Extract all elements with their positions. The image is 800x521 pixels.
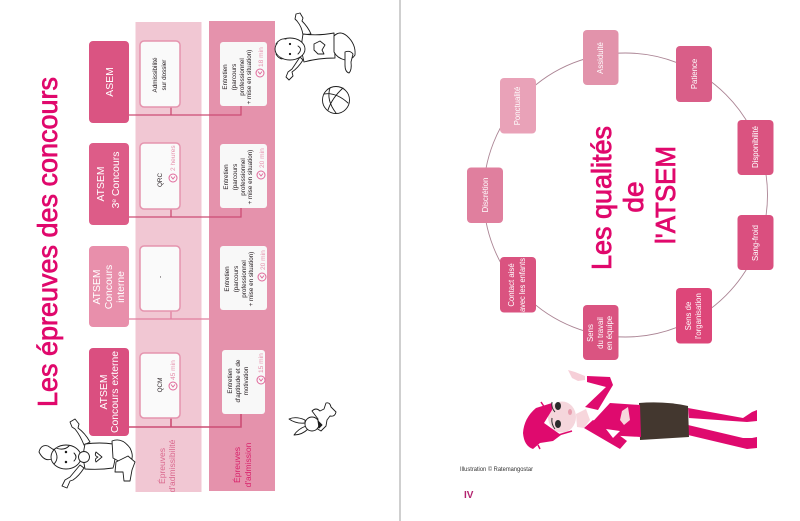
admission box: ASEM: (parcours <box>231 64 238 90</box>
admissibilité box: aucune épreuve: - <box>157 276 164 278</box>
admission box: ATSEM 3e concours: + mise en situation) <box>247 150 254 204</box>
quality: sang-froid <box>738 215 774 270</box>
quality: contact aisé avec les enfants <box>500 257 536 312</box>
illustration: woman <box>523 370 757 449</box>
quality: disponibilité: Disponibilité <box>751 126 760 168</box>
admission box: ATSEM concours externe: Entretien <box>227 368 234 394</box>
admissibilité box: ASEM <box>140 41 180 107</box>
quality: assiduité <box>583 30 618 85</box>
header: ASEM <box>89 41 129 123</box>
quality: sens de l'organisation: l'organisation <box>694 293 703 339</box>
label: épreuves d'admissibilité: d'admissibilité <box>167 439 177 492</box>
illustration: baby with heart top <box>275 13 355 80</box>
admissibilité box: QRC: 2 heures <box>170 145 177 171</box>
admissibilité box: QRC: QRC <box>157 173 164 187</box>
quality: disponibilité <box>738 120 774 175</box>
title: les qualités de l'ATSEM: Les qualités <box>586 126 617 270</box>
admission box: ATSEM concours interne: (parcours <box>233 266 240 292</box>
admission box: ASEM: Entretien <box>222 64 229 90</box>
quality: ponctualité <box>500 78 536 134</box>
label: épreuves d'admissibilité <box>157 439 177 492</box>
admissibilité box: ASEM: sur dossier <box>161 60 168 90</box>
header: ATSEM concours interne: Concours <box>104 265 115 309</box>
header: ATSEM 3e concours <box>89 143 129 225</box>
header: ATSEM 3e concours: Concours <box>111 152 122 199</box>
admissibilité box: QCM: QCM <box>157 378 164 392</box>
header: ATSEM 3e concours: e <box>111 199 118 203</box>
admission box: ATSEM concours externe: d'aptitude et de <box>235 359 242 402</box>
band: épreuves d'admission <box>209 21 275 491</box>
admission box: ASEM: professionnel <box>239 58 246 96</box>
label: épreuves d'admission: d'admission <box>243 442 253 487</box>
header: ASEM: ASEM <box>105 67 116 97</box>
illustration: ball <box>322 86 350 114</box>
illustration: baby with heart dress <box>39 419 135 488</box>
quality: sang-froid: Sang-froid <box>751 225 760 261</box>
quality: patience: Patience <box>690 59 699 89</box>
admission box: ATSEM 3e concours <box>220 144 267 208</box>
credit: Illustration © Ratemangostar <box>460 465 534 473</box>
admission box: ATSEM 3e concours: (parcours <box>232 164 239 190</box>
admission box: ATSEM 3e concours: Entretien <box>223 164 230 190</box>
admission box: ATSEM concours interne: 20 min <box>260 250 267 270</box>
quality: sens de l'organisation: Sens de <box>684 302 693 330</box>
quality: patience <box>676 46 712 102</box>
header: ATSEM concours externe: Concours externe <box>110 351 121 433</box>
quality: sens du travail en équipe: en équipe <box>605 316 614 350</box>
admission box: ASEM <box>220 42 267 106</box>
band: épreuves d'admissibilité <box>136 22 202 492</box>
admission box: ATSEM 3e concours: professionnel <box>240 158 247 196</box>
admission box: ATSEM concours interne: professionnel <box>241 260 248 298</box>
quality: sens de l'organisation <box>676 288 712 344</box>
page number: IV <box>464 490 474 501</box>
admission box: ATSEM concours externe: motivation <box>243 366 250 395</box>
quality: discrétion <box>467 168 503 223</box>
quality: contact aisé avec les enfants: avec les enfants <box>518 258 527 312</box>
header: ATSEM concours externe <box>89 348 129 436</box>
admission box: ATSEM concours externe: 15 min <box>258 353 265 373</box>
quality: assiduité: Assiduité <box>596 42 605 74</box>
header: ATSEM 3e concours: ATSEM <box>96 166 107 202</box>
admission box: ATSEM concours interne <box>220 246 267 310</box>
quality: discrétion: Discrétion <box>481 178 490 212</box>
admission box: ASEM: + mise en situation) <box>246 50 253 104</box>
title: les qualités de l'ATSEM: de <box>618 181 649 213</box>
quality: ponctualité: Ponctualité <box>513 87 522 125</box>
admission box: ATSEM concours externe <box>222 350 265 414</box>
title: les qualités de l'ATSEM <box>586 126 681 270</box>
header: ATSEM 3e concours: 3 <box>111 203 122 208</box>
header: ATSEM concours externe: ATSEM <box>99 374 110 410</box>
admission box: ATSEM concours interne: + mise en situation) <box>248 252 255 306</box>
quality: sens du travail en équipe: du travail <box>596 317 605 349</box>
admissibilité box: aucune épreuve <box>140 246 180 311</box>
admission box: ATSEM concours interne: Entretien <box>224 266 231 292</box>
header: ATSEM concours interne <box>89 246 129 327</box>
panel: les qualités de l'ATSEM <box>460 30 774 501</box>
admissibilité box: QCM <box>140 353 180 418</box>
illustration: toy rabbit <box>289 403 336 435</box>
admissibilité box: ASEM: Admissibilité <box>152 57 159 92</box>
quality: contact aisé avec les enfants: Contact aisé <box>507 263 516 307</box>
admission box: ASEM: 18 min <box>258 47 265 67</box>
connectors <box>129 106 241 427</box>
quality: sens du travail en équipe: Sens <box>586 324 595 342</box>
quality: sens du travail en équipe <box>583 305 618 360</box>
header: ATSEM concours interne: ATSEM <box>92 269 103 305</box>
label: épreuves d'admission <box>232 442 253 487</box>
title: les qualités de l'ATSEM: l'ATSEM <box>650 146 681 244</box>
ring connecting the qualities <box>484 53 768 337</box>
header: ATSEM concours interne: interne <box>116 271 127 303</box>
title: les épreuves des concours: Les épreuves des concours <box>32 77 63 407</box>
label: épreuves d'admission: Épreuves <box>232 447 242 483</box>
admissibilité box: QRC <box>140 143 180 209</box>
panel: les épreuves des concours <box>32 13 355 492</box>
label: épreuves d'admissibilité: Épreuves <box>157 448 167 484</box>
admission box: ATSEM 3e concours: 20 min <box>259 148 266 168</box>
admissibilité box: QCM: 45 min <box>170 360 177 380</box>
